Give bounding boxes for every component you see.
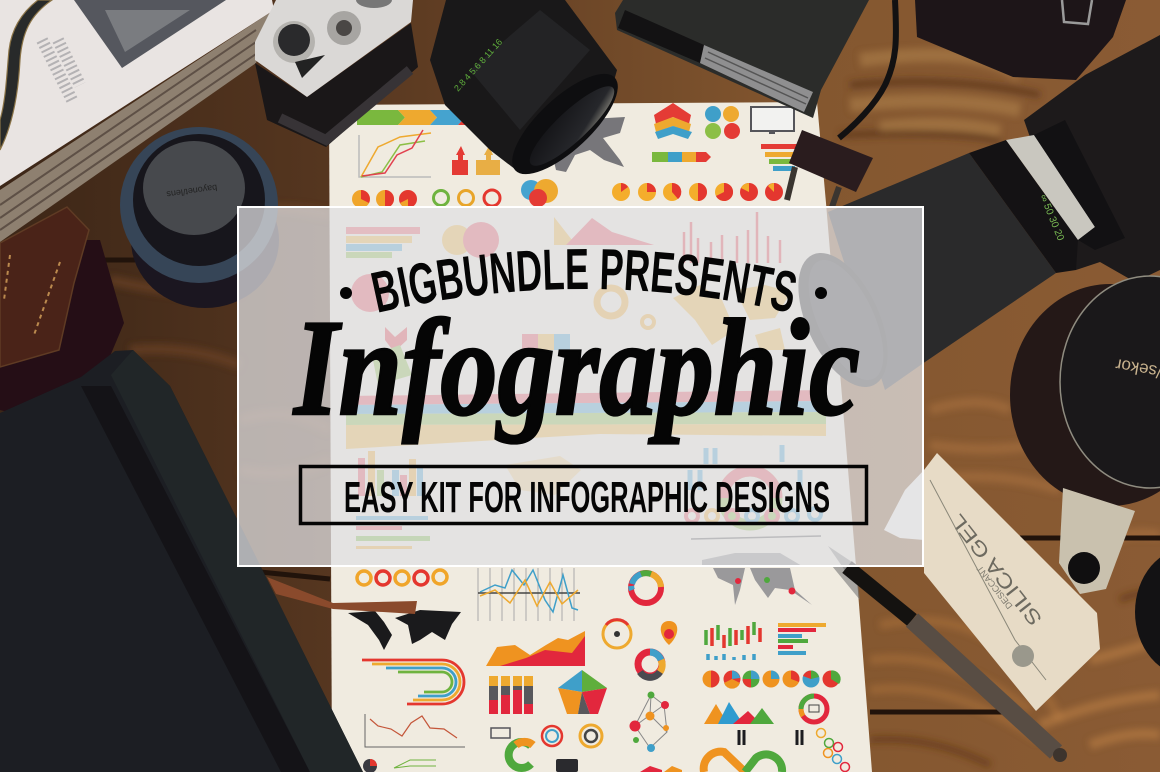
- top line chart: [359, 130, 431, 177]
- open book top-left: [0, 0, 274, 242]
- black notebook bottom left: [0, 350, 363, 772]
- white tissue: [884, 470, 924, 540]
- large telephoto lens right: [780, 35, 1160, 400]
- dots either side of heading: [340, 287, 827, 299]
- horizontal bars: [778, 623, 826, 655]
- silica gel packet: SILICA GEL: [946, 510, 1047, 629]
- lens cap left: [120, 127, 279, 308]
- cable and plug: [787, 0, 896, 207]
- step circles: [816, 728, 850, 772]
- leather strap: [267, 577, 417, 614]
- dark camera top right: [915, 0, 1126, 80]
- grey world map: [552, 117, 625, 172]
- candlestick chart: [706, 622, 760, 660]
- pie row lower: [702, 670, 841, 689]
- donut top: [631, 573, 661, 603]
- pin icon: [661, 621, 677, 645]
- subtitle box: [300, 466, 866, 524]
- vintage camera top: [255, 0, 418, 147]
- curved heading: BIGBUNDLE PRESENTS: [370, 249, 796, 312]
- silica gel packet: DESICCANT: [974, 563, 1015, 611]
- camera lens top: 2.8 4 5.6 8 11 16: [452, 37, 504, 93]
- lens cap left: bayonet/lens: [165, 183, 218, 200]
- area chart: [486, 631, 585, 666]
- tower icons: [452, 146, 500, 175]
- monitor icon: [751, 107, 794, 134]
- silica gel packet: [924, 453, 1100, 711]
- top strip of chevrons: [357, 110, 470, 125]
- multi line chart: [478, 568, 580, 621]
- four petal icon: [705, 106, 740, 139]
- paper with printed infographics: [329, 102, 872, 772]
- subtitle box: EASY KIT FOR INFOGRAPHIC DESIGNS: [344, 473, 830, 522]
- infinity diagram: [704, 730, 802, 772]
- lens with cap right: [1010, 276, 1160, 677]
- mountain chart: [704, 702, 774, 724]
- arrow row: [652, 152, 711, 162]
- small bottom icons: [363, 725, 602, 772]
- venn diagram: [521, 179, 558, 207]
- fountain pen: [828, 546, 1067, 762]
- charts behind panel: [346, 212, 826, 566]
- donut with monitor: [801, 696, 827, 722]
- top pie row left: [352, 190, 500, 208]
- script title: Infographic: [292, 291, 860, 444]
- top pie row right: [612, 183, 783, 201]
- translucent title panel: [238, 207, 923, 566]
- small line chart: [365, 714, 465, 747]
- ring row: [357, 570, 447, 585]
- arch icon: [654, 103, 692, 139]
- donut lower: [638, 652, 662, 677]
- red shield icons: [640, 766, 682, 772]
- leather case left: [0, 207, 124, 418]
- network diagram: [630, 692, 669, 752]
- camera lens top: [430, 0, 632, 189]
- flash unit top: [615, 0, 869, 118]
- stacked bars: [489, 676, 533, 714]
- large telephoto lens right: ∞ 50 30 20: [1037, 193, 1066, 243]
- person circle: [603, 620, 631, 648]
- top right bars: [761, 144, 797, 171]
- grey map with pins: [713, 568, 812, 605]
- curved heading: [370, 249, 796, 312]
- rainbow bracket: [362, 660, 464, 704]
- pentagon chart: [558, 670, 607, 714]
- black world map: [348, 610, 461, 650]
